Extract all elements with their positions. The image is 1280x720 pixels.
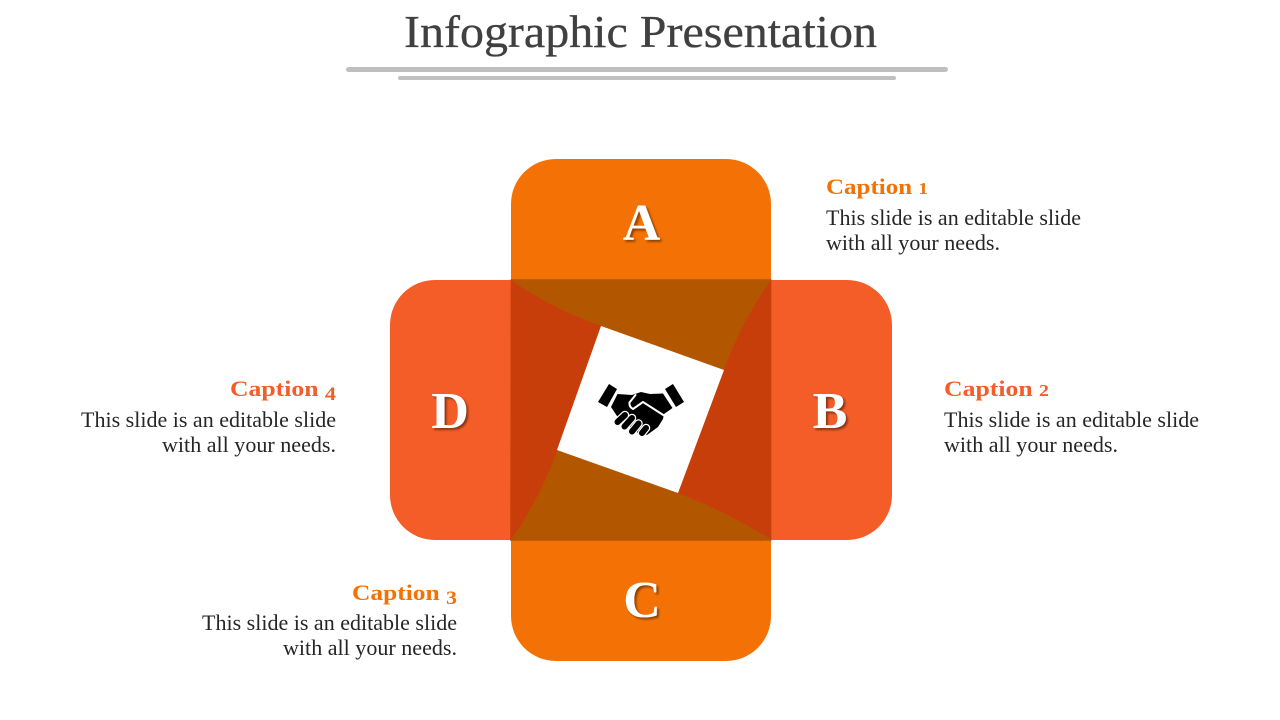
cross diagram (390, 159, 892, 661)
overlap: top (511, 280, 771, 370)
caption 1 block (826, 174, 1081, 255)
panel: D (390, 280, 511, 540)
caption 3 block: This slide is an editable slide (202, 610, 457, 635)
panel: A (511, 159, 771, 280)
icon: handshake (598, 384, 684, 435)
title underline (346, 67, 948, 80)
caption 1 block: with all your needs. (826, 230, 1000, 255)
caption 3 block: Caption (352, 580, 428, 605)
overlap: right (678, 280, 771, 540)
caption 4 block: Caption (230, 376, 306, 401)
letter D: D (431, 383, 469, 440)
caption 3 block (202, 580, 457, 660)
caption 2 block: Caption 2 (944, 376, 1049, 401)
caption 3 block: with all your needs. (283, 635, 457, 660)
overlap: bottom (510, 450, 771, 540)
caption 3 block: 3 (446, 588, 457, 609)
letter B: B (813, 383, 847, 440)
overlap: left (510, 280, 601, 540)
caption 1 block: This slide is an editable slide (826, 205, 1081, 230)
caption 1 block: Caption 1 (826, 174, 928, 199)
panel: B (771, 280, 892, 540)
caption 4 block: with all your needs. (162, 432, 336, 457)
letter C: C (623, 572, 661, 629)
title: Infographic Presentation (404, 6, 877, 57)
caption 2 block: with all your needs. (944, 432, 1118, 457)
caption 2 block: This slide is an editable slide (944, 407, 1199, 432)
caption 2 block (944, 376, 1199, 457)
letter A: A (623, 195, 661, 252)
caption 4 block (81, 376, 337, 457)
center white square (557, 326, 724, 493)
caption 4 block: 4 (325, 384, 337, 405)
panel: C (511, 540, 771, 661)
caption 4 block: This slide is an editable slide (81, 407, 336, 432)
